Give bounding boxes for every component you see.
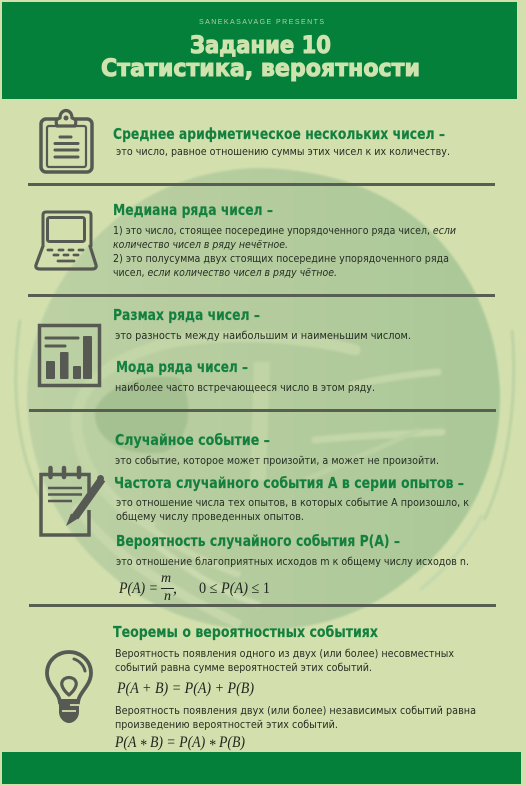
text: frequency definition: это отношение числа тех опытов, в которых событие А произошло, к bbox=[116, 497, 469, 509]
text: sum theorem: Вероятность появления одного из двух (или более) несовместных bbox=[115, 648, 454, 660]
text: median definition: количество чисел в ряду нечётное. bbox=[113, 239, 288, 251]
heading: frequency: Частота случайного события А в серии опытов – bbox=[114, 474, 464, 492]
section: median bbox=[113, 201, 456, 279]
formula: product: B) = P(A) bbox=[147, 734, 209, 751]
text: frequency definition: общему числу проведенных опытов. bbox=[116, 511, 304, 523]
heading: range: Размах ряда чисел – bbox=[113, 306, 260, 324]
heading: arithmetic mean: Среднее арифметическое нескольких чисел – bbox=[113, 125, 445, 143]
text: product theorem bbox=[115, 705, 476, 731]
text: product theorem: произведению вероятностей этих событий. bbox=[115, 719, 338, 731]
heading: theorems: Теоремы о вероятностных событиях bbox=[113, 623, 378, 641]
text: median definition: чисел, если количество чисел в ряду чётное. bbox=[113, 267, 337, 279]
formula: product: * bbox=[140, 737, 147, 754]
heading: random event: Случайное событие – bbox=[115, 431, 270, 449]
text: product theorem: Вероятность появления двух (или более) независимых событий равна bbox=[115, 705, 476, 717]
title: Статистика, вероятности bbox=[101, 54, 420, 82]
text: sum theorem bbox=[115, 648, 454, 674]
section: arithmetic mean bbox=[113, 125, 450, 158]
formula: probability bbox=[118, 571, 270, 604]
presenter line: SANEKASAVAGE PRESENTS bbox=[199, 19, 324, 26]
heading: mode: Мода ряда чисел – bbox=[116, 358, 248, 376]
title bbox=[101, 31, 420, 82]
icon: light bulb bbox=[47, 652, 91, 723]
text: median definition: 2) это полусумма двух стоящих посередине упорядоченного ряда bbox=[113, 253, 449, 265]
footer band bbox=[2, 752, 521, 784]
heading: probability: Вероятность случайного события Р(А) – bbox=[116, 532, 400, 550]
header band bbox=[2, 2, 517, 99]
section: frequency bbox=[114, 474, 469, 523]
background logo: brushed circle bbox=[16, 168, 514, 630]
title: Задание 10 bbox=[190, 31, 331, 59]
text: range definition: это разность между наибольшим и наименьшим числом. bbox=[115, 330, 411, 342]
text: random event definition: это событие, которое может произойти, а может не произойти. bbox=[115, 455, 439, 467]
formula: product: * bbox=[209, 737, 216, 754]
formula: probability: m bbox=[161, 571, 171, 586]
text: frequency definition bbox=[116, 497, 469, 523]
text: sum theorem: событий равна сумме вероятностей этих событий. bbox=[115, 662, 372, 674]
heading: median: Медиана ряда чисел – bbox=[113, 201, 273, 219]
icon: clipboard bbox=[41, 110, 92, 172]
section: probability bbox=[116, 532, 469, 604]
text: median definition: 1) это число, стоящее посередине упорядоченного ряда чисел, если bbox=[113, 225, 456, 237]
section: random event bbox=[115, 431, 439, 467]
section: mode bbox=[115, 358, 375, 394]
formula: sum: P(A + B) = P(A) + P(B) bbox=[116, 680, 254, 697]
formula: probability: P(A) = bbox=[118, 580, 158, 597]
formula: probability: , bbox=[173, 580, 177, 597]
icon: bar chart bbox=[40, 326, 100, 386]
text: probability definition: это отношение благоприятных исходов m к общему числу исходов n. bbox=[116, 556, 469, 568]
text: median definition bbox=[113, 225, 456, 279]
formula: probability: 0 ≤ P(A) ≤ 1 bbox=[199, 580, 270, 597]
icon: laptop bbox=[36, 212, 96, 269]
text: arithmetic mean definition: это число, равное отношению суммы этих чисел к их количеству. bbox=[116, 146, 450, 158]
section: range bbox=[113, 306, 411, 342]
formula: product: P(A bbox=[115, 734, 140, 751]
formula: probability: n bbox=[164, 589, 171, 604]
text: mode definition: наиболее часто встречающееся число в этом ряду. bbox=[115, 382, 375, 394]
formula: product: P(B) bbox=[216, 734, 245, 751]
section: theorems bbox=[113, 623, 476, 754]
icon: notepad with pencil bbox=[41, 468, 104, 535]
